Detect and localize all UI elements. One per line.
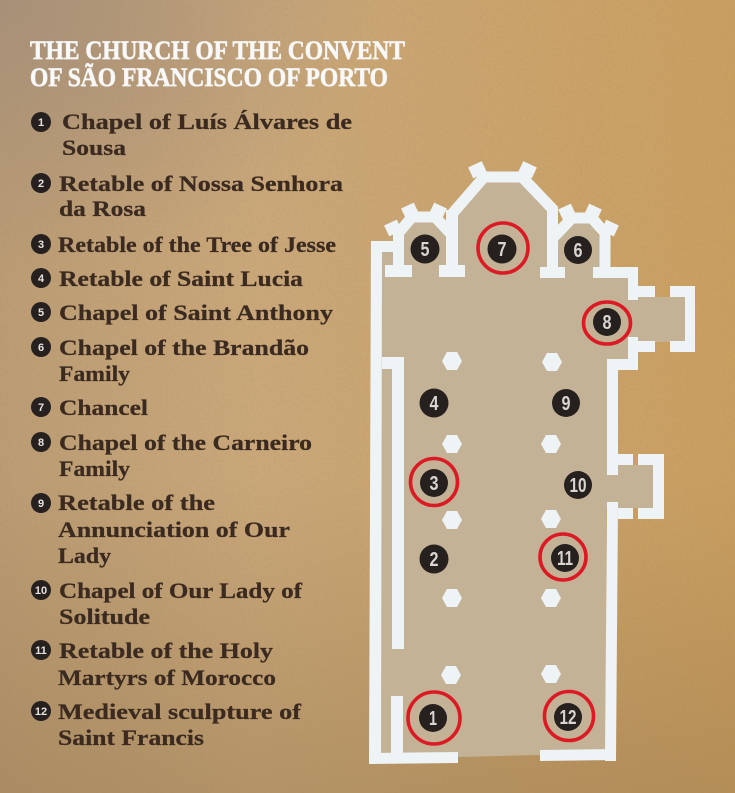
legend list (31, 109, 352, 750)
legend item 10 (31, 578, 303, 629)
legend item 8 (31, 430, 312, 481)
legend item 8: 8 (38, 437, 44, 449)
legend item 4: Retable of Saint Lucia (59, 266, 303, 291)
legend item 9: Annunciation of Our (58, 517, 290, 542)
legend item 7 (31, 395, 148, 420)
legend item 3: 3 (38, 239, 44, 251)
legend item 11 (31, 638, 276, 690)
legend item 2: Retable of Nossa Senhora (59, 171, 343, 196)
legend item 1 (31, 109, 352, 160)
legend item 11: Martyrs of Morocco (58, 665, 276, 690)
title: OF SÃO FRANCISCO OF PORTO (30, 63, 388, 92)
marker 4: 4 (430, 393, 439, 415)
marker 11: 11 (557, 548, 573, 570)
marker 8: 8 (602, 312, 612, 334)
legend item 1: Chapel of Luís Álvares de (62, 109, 352, 134)
legend item 2: 2 (38, 178, 44, 190)
legend item 8: Chapel of the Carneiro (59, 430, 312, 455)
legend item 2: da Rosa (59, 196, 146, 221)
columns (441, 352, 562, 684)
legend item 10: Chapel of Our Lady of (59, 578, 303, 603)
marker 6: 6 (574, 240, 582, 262)
legend item 5: Chapel of Saint Anthony (59, 300, 334, 325)
marker 4 (420, 388, 448, 418)
marker 1 (408, 692, 460, 744)
title: THE CHURCH OF THE CONVENT (30, 36, 405, 65)
legend item 11: Retable of the Holy (59, 638, 274, 663)
floor plan (369, 161, 695, 764)
legend item 12: 12 (35, 706, 47, 718)
marker 1: 1 (429, 708, 437, 730)
legend item 9 (31, 490, 290, 568)
church floor (381, 180, 686, 757)
marker 12: 12 (560, 707, 576, 729)
marker 10: 10 (570, 475, 586, 497)
marker 8 (584, 302, 630, 344)
legend item 12 (31, 699, 302, 750)
legend item 1: 1 (38, 117, 44, 129)
legend item 8: Family (59, 456, 131, 481)
legend item 1: Sousa (62, 135, 126, 160)
marker 9: 9 (562, 393, 570, 415)
marker 3: 3 (430, 473, 438, 495)
marker 2 (420, 544, 448, 574)
marker 12 (544, 692, 594, 740)
legend item 6: Chapel of the Brandão (59, 335, 309, 360)
legend item 9: 9 (38, 498, 44, 510)
legend item 9: Retable of the (58, 490, 215, 515)
marker 7 (478, 223, 528, 273)
legend item 7: Chancel (59, 395, 148, 420)
buttresses (401, 203, 419, 219)
legend item 5: 5 (38, 307, 44, 319)
legend item 12: Medieval sculpture of (58, 699, 302, 724)
legend item 4: 4 (38, 273, 45, 285)
marker 3 (410, 458, 458, 506)
legend item 12: Saint Francis (58, 725, 204, 750)
marker 11 (540, 534, 586, 580)
legend item 7: 7 (38, 402, 44, 414)
marker 7: 7 (498, 239, 506, 261)
marker 9 (552, 389, 580, 417)
legend item 6 (31, 335, 309, 386)
legend item 9: Lady (58, 543, 112, 568)
marker 6 (564, 236, 592, 264)
marker 2: 2 (430, 549, 438, 571)
legend item 11: 11 (35, 645, 47, 657)
legend item 10: 10 (35, 585, 47, 597)
legend item 2 (31, 171, 343, 221)
legend item 6: Family (59, 361, 131, 386)
legend item 6: 6 (38, 342, 44, 354)
legend item 10: Solitude (59, 604, 150, 629)
walls (369, 161, 695, 764)
marker 10 (564, 471, 592, 499)
marker 5: 5 (420, 239, 430, 261)
title (30, 36, 405, 92)
marker 5 (410, 234, 440, 264)
legend item 3: Retable of the Tree of Jesse (58, 232, 336, 257)
